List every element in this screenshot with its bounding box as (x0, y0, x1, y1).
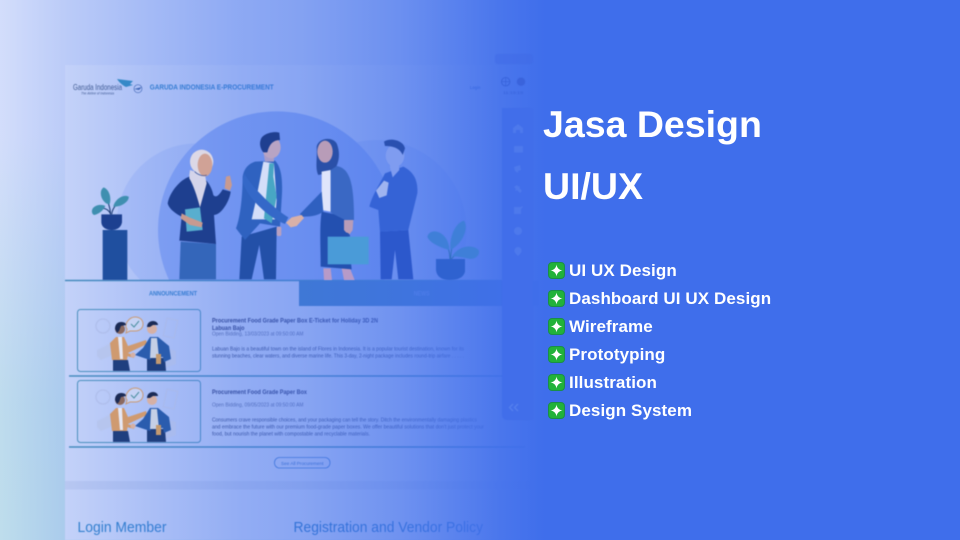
divider line (65, 280, 502, 281)
sidebar (501, 77, 525, 418)
tabs (65, 280, 539, 306)
list item: Dashboard UI UX Design: Dashboard UI UX Design (569, 289, 771, 308)
announcement card 2 text (212, 390, 484, 438)
tab label: announcement: ANNOUNCEMENT (149, 290, 197, 297)
announcement card 1 frame (78, 310, 200, 372)
announcement card 1 text: Labuan Bajo (212, 326, 245, 332)
list item: Prototyping: Prototyping (569, 345, 665, 364)
announcement card 2 text: Consumers crave responsible choices, and your packaging can tell the story. Ditch the environmentally damaging plastics (212, 418, 477, 424)
card 1 illustration (96, 317, 178, 371)
login link: Login (470, 85, 481, 90)
man clapping hands (369, 140, 417, 279)
announcement card 1 text (212, 319, 464, 360)
header icons: 11:19:19 (503, 91, 523, 95)
logo: The Airline of Indonesia (81, 92, 114, 96)
collapse chevrons (510, 404, 518, 411)
announcement card 1 text: stunning beaches, clear waters, and diverse marine life. This 3-day, 2-night package includes round-trip airfare . . . . . (212, 354, 464, 360)
footer heading: login member: Login Member (78, 519, 166, 536)
hero background circles (118, 111, 384, 280)
announcement card 2 text: and embrace the future with our premium food-grade paper boxes. We offer beautiful solutions that don't just protect your (212, 424, 484, 430)
title (543, 103, 762, 207)
title: UI/UX (543, 165, 643, 207)
announcement card 1 text: Open Bidding, 13/03/2023 at 09:50:00 AM (212, 331, 304, 337)
site title: GARUDA INDONESIA E-PROCUREMENT (150, 83, 274, 92)
woman with briefcase (300, 139, 369, 280)
title: Jasa Design (543, 103, 762, 145)
see all procurement button: See All Procurement (281, 461, 324, 466)
list item: Wireframe: Wireframe (569, 317, 653, 336)
see all procurement button (274, 458, 330, 468)
list item: Design System: Design System (569, 401, 692, 420)
card 2 illustration (96, 388, 178, 442)
page panel (65, 65, 535, 540)
announcement card 1 text: Procurement Food Grade Paper Box E-Ticket for Holiday 3D 2N (212, 319, 378, 325)
website screenshot (64, 66, 502, 540)
logo (73, 79, 142, 96)
man in suit shaking hands (236, 132, 288, 279)
announcement card 2 text: Open Bidding, 09/05/2023 at 09:50:00 AM (212, 402, 304, 408)
announcement card 2 frame (78, 380, 200, 442)
announcement card 1 text: Labuan Bajo is a beautiful town on the island of Flores in Indonesia. It is a popular tourist destination, known for its (212, 346, 464, 352)
header (73, 79, 481, 96)
tab: news (299, 281, 539, 306)
tab label: news: NEWS (414, 290, 430, 297)
sidebar icons (513, 124, 523, 256)
left plant on pedestal (92, 187, 129, 280)
woman with hijab (168, 150, 232, 279)
right plant (427, 221, 479, 280)
footer heading: registration and vendor policy: Registration and Vendor Policy (294, 519, 483, 536)
list item: UI UX Design: UI UX Design (569, 261, 677, 280)
list item: Illustration: Illustration (569, 373, 657, 392)
handshake (286, 215, 304, 227)
service list (548, 261, 771, 420)
header icons (502, 78, 525, 95)
announcement card 2 text: Procurement Food Grade Paper Box (212, 390, 308, 396)
announcement card 2 text: food, but nourish the planet with compostable and recyclable materials. (212, 432, 370, 438)
logo: Garuda Indonesia (73, 82, 122, 92)
